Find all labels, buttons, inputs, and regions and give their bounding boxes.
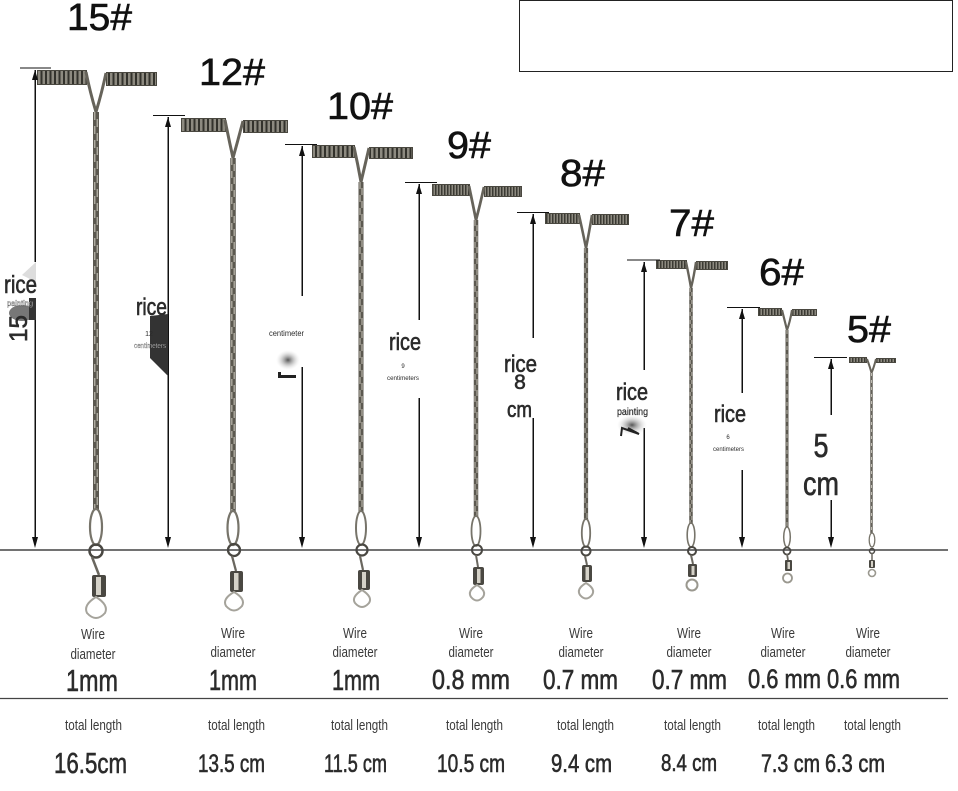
size headings — [67, 0, 891, 351]
size headings: 12# — [199, 52, 265, 94]
wire diameter values: 0.6 mm — [748, 664, 821, 694]
wire diameter row: Wire — [343, 625, 367, 642]
wire diameter row: Wire — [569, 625, 593, 642]
total length labels: total length — [331, 717, 388, 734]
rig 8# — [546, 214, 628, 598]
rig 7# — [656, 260, 728, 590]
divider rule — [0, 698, 948, 700]
wire diameter row: diameter — [846, 644, 891, 661]
total length values: 7.3 cm — [761, 750, 820, 778]
side label 10#: centimeter — [269, 329, 304, 338]
dimension arrow 7# — [627, 260, 660, 548]
dimension arrow 10# — [285, 144, 317, 548]
side label 7# — [616, 379, 648, 436]
wire diameter values: 1mm — [332, 665, 380, 697]
side label 9#: 9 — [401, 364, 405, 370]
side label 8#: cm — [507, 397, 532, 422]
total length values: 6.3 cm — [825, 750, 885, 778]
size headings: 10# — [327, 86, 393, 128]
total length labels — [65, 717, 901, 734]
size headings: 8# — [560, 153, 605, 195]
side label 6#: 6 — [726, 435, 730, 441]
wire diameter values: 0.7 mm — [652, 664, 727, 695]
side label 9# — [387, 329, 421, 382]
wire diameter values: 1mm — [209, 665, 257, 697]
side label 9#: centimeters — [387, 376, 419, 382]
side label 12#: centimeters — [134, 343, 166, 350]
wire diameter row — [70, 625, 891, 663]
rig 10# — [312, 146, 412, 607]
dimension arrow 15# — [20, 68, 51, 548]
wire diameter row: Wire — [459, 625, 483, 642]
side label 15#: rice — [4, 271, 37, 299]
size headings: 6# — [759, 252, 804, 294]
side label 7#: painting — [617, 407, 648, 418]
wire diameter row: diameter — [448, 644, 494, 661]
total length values: 9.4 cm — [551, 750, 612, 778]
wire diameter values: 1mm — [66, 663, 118, 698]
side label 15# — [4, 262, 37, 342]
side label 8# — [504, 351, 537, 422]
side label 5#: cm — [803, 465, 839, 502]
total length labels: total length — [208, 717, 265, 734]
total length values: 10.5 cm — [437, 750, 505, 778]
size headings: 7# — [669, 203, 714, 245]
wire diameter values: 0.8 mm — [432, 664, 510, 695]
total length values: 13.5 cm — [198, 750, 265, 778]
dimension arrow 5# — [814, 357, 847, 548]
wire diameter values: 0.6 mm — [827, 664, 900, 694]
side label 6#: rice — [714, 401, 746, 428]
dimension arrow 8# — [517, 212, 549, 548]
side label 15#: painting — [7, 299, 33, 308]
side label 7#: rice — [616, 379, 648, 406]
rig 5# — [850, 358, 896, 576]
total length values: 11.5 cm — [324, 750, 387, 778]
total length values: 8.4 cm — [661, 750, 717, 777]
side label 6#: centimeters — [713, 447, 744, 453]
horizontal baseline rule — [0, 549, 948, 551]
side label 12#: rice — [136, 294, 167, 321]
wire diameter row: Wire — [677, 625, 701, 642]
total length labels: total length — [557, 717, 614, 734]
rig 15# — [38, 70, 156, 618]
wire diameter row: diameter — [210, 644, 256, 661]
rig 12# — [182, 118, 288, 610]
dimension arrow 12# — [153, 115, 185, 548]
empty white box top right — [520, 0, 952, 72]
wire diameter row: diameter — [332, 644, 378, 661]
total length labels: total length — [664, 717, 721, 734]
total length labels: total length — [446, 717, 503, 734]
side label 6# — [713, 401, 746, 453]
wire diameter row: Wire — [221, 625, 245, 642]
total length values: 16.5cm — [54, 748, 127, 780]
wire diameter values — [66, 663, 900, 698]
size headings: 9# — [447, 125, 491, 167]
wire diameter row: Wire — [81, 626, 105, 643]
wire diameter row: diameter — [70, 646, 116, 663]
total length labels: total length — [65, 717, 122, 734]
side label 9#: rice — [389, 329, 421, 356]
wire diameter row: diameter — [558, 644, 604, 661]
wire diameter row: Wire — [856, 625, 880, 642]
size headings: 5# — [847, 309, 891, 351]
total length labels: total length — [758, 717, 815, 734]
side label 8#: 8 — [514, 371, 526, 394]
rig 9# — [432, 184, 522, 600]
rig 6# — [758, 308, 816, 582]
side label 8#: rice — [504, 351, 537, 378]
dimension arrow 6# — [727, 307, 760, 548]
side label 5# — [803, 427, 839, 502]
wire diameter row: diameter — [760, 644, 806, 661]
wire diameter values: 0.7 mm — [543, 664, 618, 695]
side label 10# — [269, 329, 304, 378]
side label 12# — [134, 294, 168, 376]
side label 5#: 5 — [814, 427, 828, 464]
total length values — [54, 748, 885, 780]
wire diameter row: diameter — [666, 644, 712, 661]
wire diameter row: Wire — [771, 625, 795, 642]
side label 15#: 15 — [5, 315, 33, 342]
dimension arrow 9# — [405, 182, 437, 548]
total length labels: total length — [844, 717, 901, 734]
side label 12#: 12 — [145, 331, 153, 338]
